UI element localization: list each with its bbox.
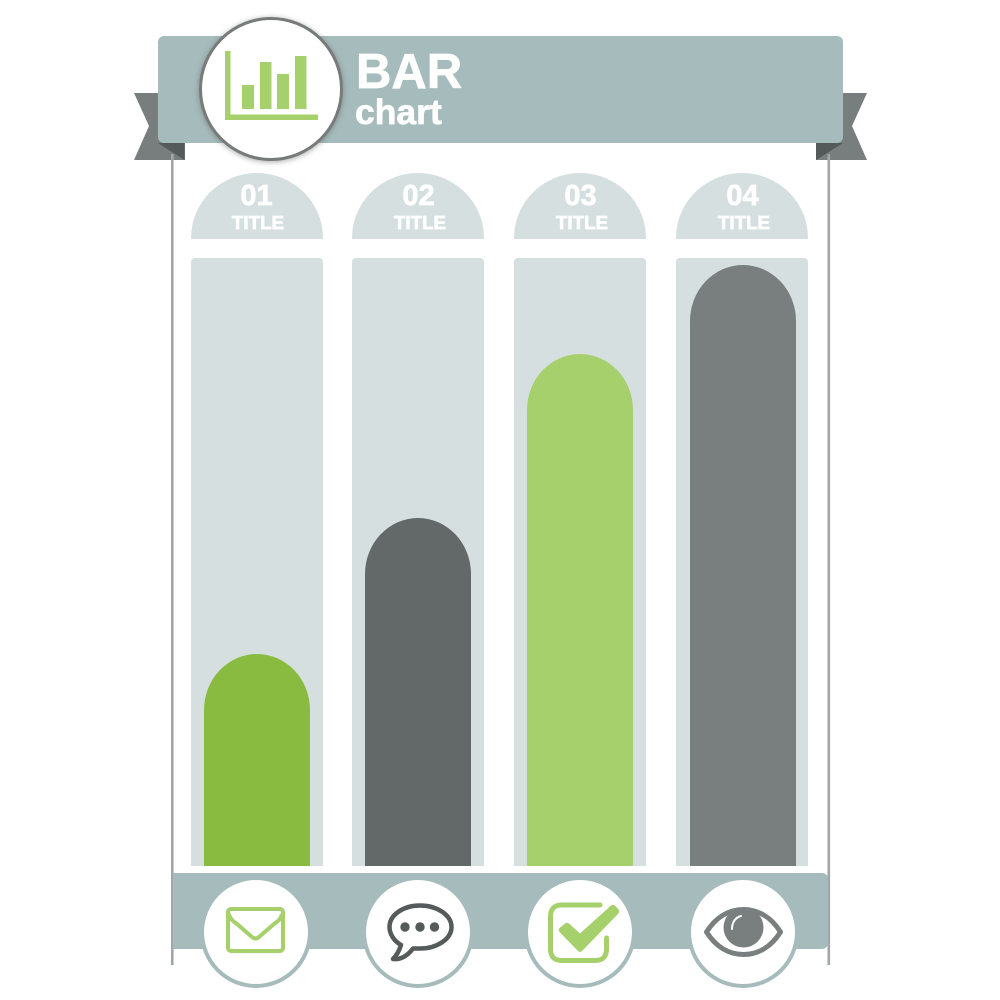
- left ribbon tail: [134, 93, 185, 160]
- bar 2: [365, 518, 471, 866]
- column 2 heading: 02: [402, 180, 435, 212]
- icon badge: speech bubble: [362, 876, 474, 988]
- header badge with chart icon: [199, 18, 343, 162]
- column 4 heading: 04: [726, 180, 759, 212]
- bar column 1: [191, 258, 323, 866]
- bar 1: [204, 654, 310, 866]
- bottom band: [173, 873, 828, 949]
- bar column 2: [352, 258, 484, 866]
- icon: eye: [706, 908, 780, 954]
- column 4 heading: [676, 173, 808, 239]
- title: chart: [355, 92, 442, 132]
- column 2 heading: [352, 173, 484, 239]
- icon: envelope: [228, 909, 283, 951]
- column 3 heading: [514, 173, 646, 239]
- title: [355, 45, 462, 132]
- icon badge: check box: [524, 876, 636, 988]
- column 2 heading: TITLE: [394, 212, 446, 233]
- bar column 3: [514, 258, 646, 866]
- icon badge: eye: [687, 876, 799, 988]
- bar column 4: [676, 258, 808, 866]
- column 3 heading: TITLE: [556, 212, 608, 233]
- bar 3: [527, 354, 633, 866]
- left pole: [171, 150, 174, 965]
- column 4 heading: TITLE: [718, 212, 770, 233]
- column 1 heading: [191, 173, 323, 239]
- column 1 heading: TITLE: [232, 212, 284, 233]
- column 1 heading: 01: [240, 180, 273, 212]
- right pole: [828, 150, 830, 965]
- right ribbon tail: [816, 93, 867, 160]
- icon: speech bubble: [390, 906, 452, 959]
- icon: check box: [550, 905, 619, 960]
- icon: bar chart: [225, 51, 318, 120]
- icon badge: envelope: [200, 876, 312, 988]
- column 3 heading: 03: [564, 180, 597, 212]
- title: BAR: [356, 45, 462, 99]
- header banner: [158, 36, 843, 143]
- bar 4: [690, 265, 796, 866]
